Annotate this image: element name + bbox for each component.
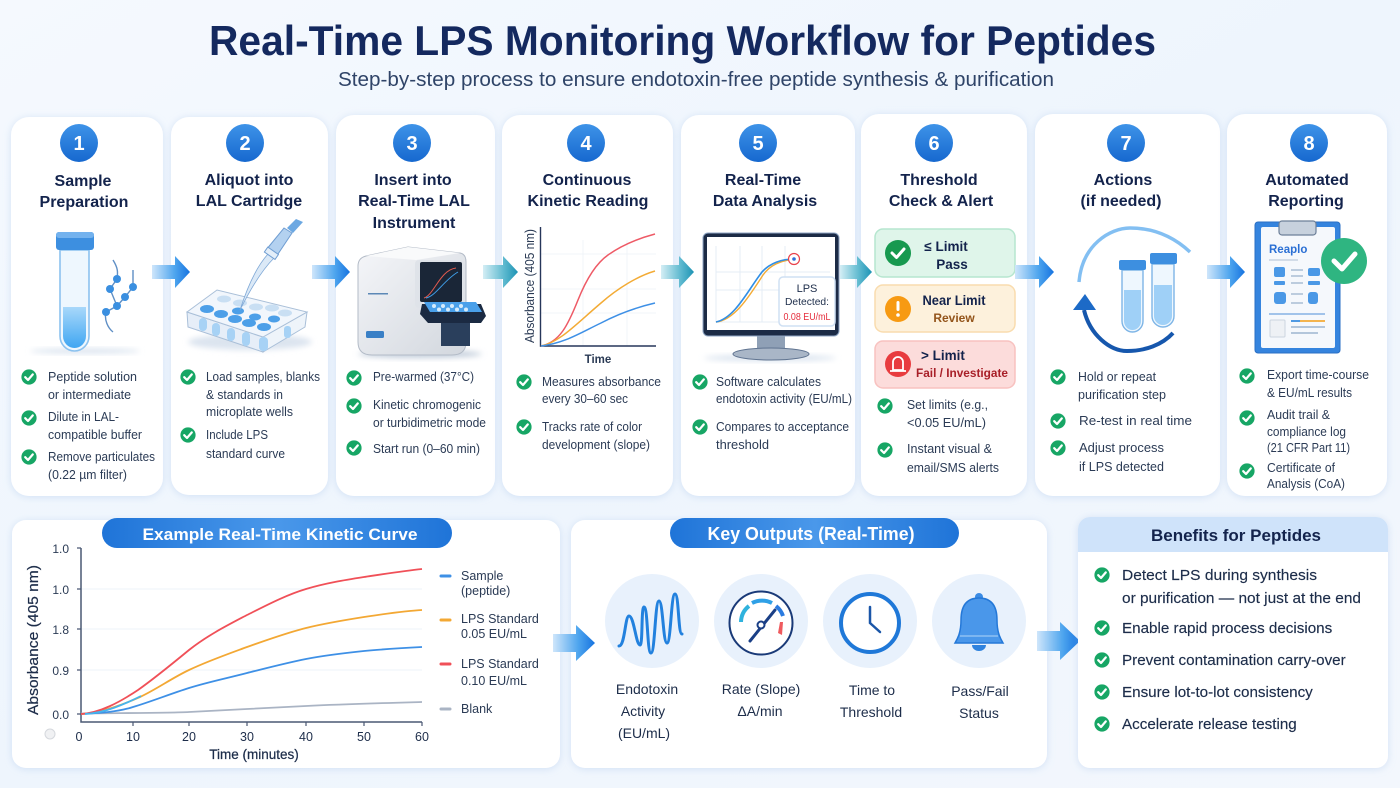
arrow: chart to key outputs (553, 625, 595, 661)
step 4 bullet list: every 30–60 sec (542, 392, 628, 406)
step 8 bullet list: Audit trail & (1267, 408, 1331, 422)
step 3 heading: Instrument (373, 215, 456, 232)
status: fail: Fail / Investigate (916, 366, 1008, 380)
step 6 bullet list: <0.05 EU/mL) (907, 416, 986, 430)
arrow: step 2 to 3 (312, 256, 350, 288)
line chart: absorbance over time: 40 (299, 730, 313, 744)
header pill: example curve (102, 518, 452, 548)
step 5 bullet list (692, 374, 852, 452)
chart legend: Blank (461, 702, 493, 716)
callout: LPS detected: Detected: (785, 296, 829, 308)
callout: LPS detected: 0.08 EU/mL (784, 312, 831, 323)
line chart: absorbance over time: 20 (182, 730, 196, 744)
chart legend (441, 569, 539, 716)
step 4 bullet list: development (slope) (542, 438, 650, 452)
step 7 bullet list: purification step (1078, 388, 1166, 402)
panel: step 8 reporting (1227, 114, 1387, 496)
step 4 badge: 4 (580, 133, 592, 155)
step 1 bullet list: Peptide solution (48, 370, 137, 384)
callout: LPS detected (779, 277, 835, 326)
step 2 bullet list: standard curve (206, 447, 285, 461)
arrow: key outputs to benefits (1037, 622, 1080, 660)
step 5 bullet list: endotoxin activity (EU/mL) (716, 392, 852, 406)
step 4 heading (528, 172, 648, 210)
benefits list: or purification — not just at the end (1122, 590, 1361, 607)
step 2 heading (196, 172, 302, 210)
step 1 bullet list: (0.22 µm filter) (48, 468, 127, 482)
step 3 heading: Real-Time LAL (358, 193, 470, 210)
step 1 badge: 1 (73, 133, 85, 155)
benefits list: Detect LPS during synthesis (1122, 567, 1317, 584)
output: endotoxin activity: Endotoxin (616, 681, 678, 697)
line chart: absorbance over time: Absorbance (405 nm) (26, 565, 42, 715)
step 2 bullet list: Load samples, blanks (206, 370, 320, 384)
icon: clipboard report with check: Reaplo (1269, 244, 1307, 256)
benefits list: Accelerate release testing (1122, 716, 1297, 733)
status: pass (875, 229, 1015, 277)
chart legend: LPS Standard (461, 657, 539, 671)
step 7 bullet list (1050, 369, 1192, 474)
step 2 bullet list: microplate wells (206, 405, 293, 419)
output: rate slope gauge: Rate (Slope) (722, 681, 800, 697)
step 8 heading: Automated (1265, 172, 1349, 189)
step 7 heading: Actions (1094, 172, 1152, 189)
step 6 bullet list (877, 398, 999, 475)
line chart: absorbance over time: Time (minutes) (209, 747, 299, 762)
line chart: absorbance over time: 0.9 (52, 664, 69, 678)
step 3 bullet list: Start run (0–60 min) (373, 442, 480, 456)
status: pass: Pass (936, 257, 968, 272)
step 4 bullet list: Measures absorbance (542, 375, 661, 389)
panel: benefits for peptides (1078, 517, 1388, 768)
benefits list (1094, 567, 1361, 733)
arrow: step 5 to 6 (840, 256, 872, 288)
step 1 heading: Preparation (40, 194, 128, 211)
step 3 badge (393, 124, 431, 162)
icon: test tube and peptide chain (30, 232, 140, 354)
line chart: absorbance over time: 0 (76, 730, 83, 744)
output: time to threshold: Time to (849, 682, 895, 698)
step 3 bullet list: Kinetic chromogenic (373, 398, 481, 412)
status: near limit: Near Limit (922, 293, 986, 308)
step 8 heading (1265, 172, 1349, 210)
output: rate slope gauge: ΔA/min (737, 703, 783, 719)
panel: key outputs (571, 518, 1047, 768)
step 4 heading: Continuous (543, 172, 632, 189)
benefits list: Prevent contamination carry-over (1122, 652, 1346, 669)
step 5 bullet list: threshold (716, 438, 769, 452)
step 1 bullet list: Remove particulates (48, 450, 155, 464)
step 1 bullet list: or intermediate (48, 388, 131, 402)
step 6 bullet list: Set limits (e.g., (907, 398, 988, 412)
chart legend: 0.05 EU/mL (461, 627, 527, 641)
panel: step 7 actions (1035, 114, 1220, 496)
step 2 heading: LAL Cartridge (196, 193, 302, 210)
step 5 heading: Real-Time (725, 172, 801, 189)
header pill: key outputs: Key Outputs (Real-Time) (708, 524, 915, 544)
step 6 badge (915, 124, 953, 162)
step 6 heading (889, 172, 994, 210)
step 8 heading: Reporting (1268, 193, 1344, 210)
benefits header (1078, 517, 1388, 552)
panel: step 5 data analysis (681, 115, 855, 496)
step 7 bullet list: if LPS detected (1079, 460, 1164, 474)
step 8 bullet list: Export time-course (1267, 368, 1369, 382)
step 2 heading: Aliquot into (205, 172, 294, 189)
panel: step 2 aliquot (171, 117, 328, 495)
step 8 bullet list: (21 CFR Part 11) (1267, 441, 1350, 455)
step 5 heading: Data Analysis (713, 193, 817, 210)
step 3 heading (358, 172, 470, 232)
output: endotoxin activity: Activity (621, 703, 665, 719)
output: pass fail status: Status (959, 705, 999, 721)
panel: step 3 instrument (336, 115, 495, 496)
line chart: absorbance over time: 60 (415, 730, 429, 744)
line chart: absorbance vs time: Absorbance (405 nm) (523, 229, 537, 343)
step 5 badge: 5 (752, 133, 764, 155)
step 1 heading (40, 173, 128, 211)
panel: step 6 threshold (861, 114, 1027, 496)
output: time to threshold: Threshold (840, 704, 902, 720)
benefits list: Enable rapid process decisions (1122, 620, 1333, 637)
step 4 badge (567, 124, 605, 162)
arrow: step 7 to 8 (1207, 256, 1245, 288)
step 5 heading (713, 172, 817, 210)
status: pass: ≤ Limit (924, 239, 968, 254)
step 1 bullet list: Dilute in LAL- (48, 410, 119, 424)
status: near limit: Review (933, 311, 975, 325)
line chart: absorbance vs time (523, 227, 656, 366)
step 1 heading: Sample (55, 173, 112, 190)
step 6 bullet list: email/SMS alerts (907, 461, 999, 475)
icon: retest cycle with tubes (1073, 228, 1190, 351)
panel: step 4 kinetic reading (502, 115, 673, 496)
step 4 bullet list (516, 374, 661, 452)
step 2 badge (226, 124, 264, 162)
step 6 badge: 6 (928, 133, 940, 155)
line chart: absorbance over time: 0.0 (52, 708, 69, 722)
chart legend: 0.10 EU/mL (461, 674, 527, 688)
step 5 bullet list: Compares to acceptance (716, 420, 849, 434)
step 8 bullet list: & EU/mL results (1267, 386, 1352, 400)
step 2 bullet list: & standards in (206, 388, 283, 402)
panel: example kinetic curve (12, 518, 560, 768)
step 7 heading: (if needed) (1081, 193, 1161, 210)
step 3 bullet list (346, 370, 486, 456)
line chart: absorbance over time (26, 542, 429, 762)
step 8 badge (1290, 124, 1328, 162)
line chart: absorbance over time: 1.0 (52, 542, 69, 556)
step 8 bullet list: Analysis (CoA) (1267, 477, 1345, 491)
line chart: absorbance over time: 1.0 (52, 583, 69, 597)
step 7 badge (1107, 124, 1145, 162)
step 7 heading (1081, 172, 1161, 210)
icon: clipboard report with check (1255, 221, 1367, 353)
step 7 bullet list: Adjust process (1079, 441, 1164, 455)
panel: step 1 sample preparation (11, 117, 163, 496)
icon: microplate and pipette (187, 219, 312, 352)
arrow: step 3 to 4 (483, 256, 518, 288)
step 8 bullet list: Certificate of (1267, 461, 1336, 475)
line chart: absorbance over time: 1.8 (52, 623, 69, 637)
arrow: step 6 to 7 (1015, 256, 1054, 288)
step 8 bullet list (1239, 368, 1369, 491)
output: endotoxin activity: (EU/mL) (618, 725, 670, 741)
step 5 badge (739, 124, 777, 162)
output: pass fail status: Pass/Fail (951, 683, 1009, 699)
benefits list: Ensure lot-to-lot consistency (1122, 684, 1313, 701)
step 3 bullet list: Pre-warmed (37°C) (373, 370, 474, 384)
line chart: absorbance over time: 30 (240, 730, 254, 744)
step 1 bullet list (21, 369, 155, 482)
step 7 bullet list: Hold or repeat (1078, 370, 1157, 384)
title: Real-Time LPS Monitoring Workflow for Peptides (209, 17, 1156, 64)
benefits header: Benefits for Peptides (1151, 526, 1321, 545)
arrow: step 4 to 5 (661, 256, 694, 288)
line chart: absorbance over time: 50 (357, 730, 371, 744)
step 2 bullet list: Include LPS (206, 428, 268, 442)
output: pass fail status (932, 574, 1026, 721)
output: rate slope gauge (714, 574, 808, 719)
step 2 badge: 2 (239, 133, 251, 155)
step 1 bullet list: compatible buffer (48, 428, 142, 442)
step 7 badge: 7 (1120, 133, 1132, 155)
step 8 bullet list: compliance log (1267, 425, 1346, 439)
chart legend: Sample (461, 569, 503, 583)
output: endotoxin activity (605, 574, 699, 741)
step 4 bullet list: Tracks rate of color (542, 420, 642, 434)
chart legend: LPS Standard (461, 612, 539, 626)
callout: LPS detected: LPS (797, 283, 817, 295)
step 1 badge (60, 124, 98, 162)
step 8 badge: 8 (1303, 133, 1315, 155)
step 3 heading: Insert into (374, 172, 452, 189)
step 6 heading: Threshold (900, 172, 978, 189)
step 6 bullet list: Instant visual & (907, 442, 993, 456)
step 2 bullet list (180, 369, 320, 461)
subtitle: Step-by-step process to ensure endotoxin-free peptide synthesis & purification (338, 68, 1054, 91)
icon: LAL instrument (358, 247, 486, 358)
output: time to threshold (823, 574, 917, 720)
step 3 bullet list: or turbidimetric mode (373, 416, 486, 430)
line chart: absorbance over time: 10 (126, 730, 140, 744)
line chart: absorbance vs time: Time (585, 354, 611, 366)
step 4 heading: Kinetic Reading (528, 193, 648, 210)
arrow: step 1 to 2 (152, 256, 190, 288)
step 5 bullet list: Software calculates (716, 375, 821, 389)
chart legend: (peptide) (461, 584, 510, 598)
status: fail (875, 341, 1015, 388)
step 7 bullet list: Re-test in real time (1079, 414, 1192, 428)
icon: monitor with curve and LPS callout (703, 233, 839, 361)
status: near limit (875, 285, 1015, 332)
step 6 heading: Check & Alert (889, 193, 994, 210)
status: fail: > Limit (921, 348, 965, 363)
header pill: key outputs (670, 518, 959, 548)
step 3 badge: 3 (406, 133, 418, 155)
header pill: example curve: Example Real-Time Kinetic Curve (142, 525, 418, 544)
